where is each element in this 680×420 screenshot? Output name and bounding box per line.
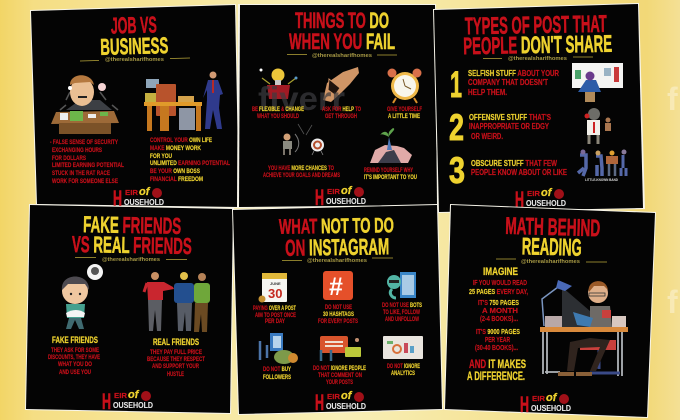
text: reading math: IF YOU WOULD READ: [473, 280, 527, 287]
icon: bot and phone: [387, 272, 416, 298]
icon: hashtag square: #: [329, 273, 343, 301]
icon: archer: [283, 124, 312, 155]
text: ask for help: ASK FOR HELP TO: [322, 107, 361, 113]
logo: EIR: [114, 393, 127, 400]
handle: [483, 56, 593, 62]
handle: @therealsharifhomes: [508, 56, 567, 62]
logo: EIR: [527, 191, 540, 198]
icon: person with puppet: [584, 108, 611, 144]
heading: what not to do: [279, 214, 394, 261]
logo: of: [541, 187, 553, 199]
text: business list: BE YOUR OWN BOSS: [150, 168, 200, 175]
text: paying for post: PAYING OVER A POST: [253, 306, 296, 312]
text: business list: UNLIMITED EARNING POTENTIAL: [150, 160, 230, 167]
text: hashtags: [318, 305, 358, 325]
text: be flexible: WHAT YOU SHOULD: [257, 114, 299, 120]
heading: types of post: [463, 11, 612, 60]
logo: EIR: [327, 394, 340, 401]
icon: calendar: 30: [268, 286, 282, 301]
text: business list: FINANCIAL FREEDOM: [150, 176, 203, 183]
handle: @therealsharifhomes: [312, 53, 372, 59]
text: fake friends: FAKE FRIENDS: [52, 335, 98, 345]
text: fake friends: WHAT YOU DO: [58, 361, 92, 368]
text: real friends: REAL FRIENDS: [153, 337, 199, 347]
heading: fake vs real friends: FAKE FRIENDS: [83, 211, 181, 239]
text: reading math: (2-4 BOOKS)...: [480, 316, 518, 323]
text: ask for help: [322, 107, 361, 120]
heading: things to do when you fail: WHEN YOU FAIL: [289, 29, 395, 54]
text: more chances: [263, 166, 340, 179]
text: business list: [150, 137, 230, 183]
text: makes a difference: A DIFFERENCE.: [467, 369, 525, 383]
handle: [80, 57, 190, 63]
text: real friends: AND SUPPORT YOUR: [152, 363, 199, 370]
text: more chances: YOU HAVE MORE CHANCES TO: [268, 166, 334, 172]
illustration: man reading at desk: [540, 280, 628, 376]
heading: math behind reading: [504, 213, 601, 262]
text: job list: [50, 139, 124, 185]
text: makes a difference: [467, 357, 526, 383]
text: give yourself time: GIVE YOURSELF: [387, 107, 422, 113]
text: do not ignore analytics: ANALYTICS: [391, 370, 415, 377]
logo: EIR: [125, 190, 138, 197]
text: fake friends: [48, 335, 100, 376]
text: makes a difference: AND IT MAKES: [469, 357, 526, 371]
logo: OUSEHOLD: [113, 400, 153, 410]
text: real friends: BECAUSE THEY RESPECT: [147, 356, 205, 363]
icon: real friends group: [144, 272, 210, 332]
heading: math behind reading: MATH BEHIND: [505, 213, 601, 242]
text: be flexible: BE FLEXIBLE & CHANGE: [252, 107, 304, 113]
text: job list: - FALSE SENSE OF SECURITY: [50, 139, 118, 146]
text: do not ignore analytics: DO NOT IGNORE: [387, 363, 420, 370]
text: give yourself time: A LITTLE TIME: [388, 114, 420, 120]
text: offensive stuff: OFFENSIVE STUFF THAT'S: [469, 113, 552, 122]
icon: hashtag square: [323, 271, 353, 301]
caption: LITTLE-KNOWN BAND: [585, 178, 618, 182]
text: fake friends: THEY ASK FOR SOME: [51, 347, 99, 354]
text: do not buy followers: FOLLOWERS: [263, 374, 291, 381]
logo: EIR: [532, 396, 545, 403]
logo: of: [128, 389, 140, 401]
text: offensive stuff: INAPPROPRIATE OR EDGY: [469, 122, 550, 131]
icon: analytics card: [383, 336, 423, 359]
icon: helping hands: [323, 67, 359, 102]
handle: [496, 259, 607, 265]
text: do not ignore people: DO NOT IGNORE PEOPLE: [313, 366, 366, 372]
handle: @therealsharifhomes: [521, 259, 580, 265]
logo: H: [515, 187, 524, 212]
logo: [515, 187, 566, 212]
text: hashtags: FOR EVERY POSTS: [318, 319, 358, 325]
logo: OUSEHOLD: [326, 401, 366, 411]
icon: fake friend with thought bubble: [62, 264, 103, 329]
text: offensive stuff: [469, 113, 552, 141]
handle: @therealsharifhomes: [307, 258, 367, 264]
text: job list: FOR DOLLARS: [52, 155, 86, 162]
text: paying for post: AIM TO POST ONCE: [255, 313, 296, 319]
text: do not ignore people: THAT COMMENT ON: [318, 373, 362, 379]
text: do not ignore people: [313, 366, 366, 386]
text: bots: TO LIKE, FOLLOW: [383, 310, 420, 316]
logo: H: [520, 392, 529, 417]
numeral 3: 3: [449, 150, 465, 191]
icon: calendar: JUNE: [270, 281, 281, 286]
icon: business owner with desk: [144, 72, 223, 131]
text: more chances: ACHIEVE YOUR GOALS AND DREAMS: [263, 173, 340, 179]
text: job list: WORK FOR SOMEONE ELSE: [52, 178, 118, 185]
text: obscure stuff: [471, 159, 568, 177]
heading: what not to do: WHAT NOT TO DO: [279, 214, 394, 239]
heading: job vs business: BUSINESS: [100, 32, 169, 60]
watermark: right edge lower: f: [667, 284, 678, 320]
text: hashtags: DO NOT USE: [325, 305, 352, 311]
numeral 2: 2: [449, 107, 464, 148]
text: reading math: (30-40 BOOKS)...: [475, 345, 518, 352]
text: real friends: [147, 337, 205, 378]
heading: math behind reading: READING: [521, 233, 582, 262]
logo: H: [315, 185, 324, 210]
logo: OUSEHOLD: [124, 197, 164, 207]
icon: stressed employee at desk: [51, 75, 119, 134]
text: selfish stuff: SELFISH STUFF ABOUT YOUR: [468, 69, 559, 78]
text: reading math: 25 PAGES EVERY DAY,: [469, 289, 528, 296]
text: bots: AND UNFOLLOW: [385, 317, 419, 323]
text: be flexible: [252, 107, 304, 120]
text: reading math: A MONTH: [482, 308, 518, 315]
text: do not buy followers: [263, 366, 291, 381]
logo: EIR: [327, 189, 340, 196]
text: bots: DO NOT USE BOTS: [382, 303, 422, 309]
panel: math behind reading: [444, 204, 656, 418]
logo: [520, 392, 571, 417]
handle: @therealsharifhomes: [102, 257, 160, 263]
text: job list: LIMITED EARNING POTENTIAL: [52, 162, 124, 169]
logo: H: [113, 186, 122, 211]
text: selfish stuff: HELP THEM.: [468, 88, 507, 97]
watermark: fiverr: fiverr: [258, 80, 345, 117]
heading: what not to do: ON INSTAGRAM: [285, 233, 389, 261]
logo: [113, 186, 164, 211]
text: reading math: IT'S 750 PAGES: [478, 300, 519, 307]
text: obscure stuff: PEOPLE KNOW ABOUT OR LIKE: [471, 168, 568, 177]
logo: OUSEHOLD: [526, 198, 566, 208]
logo: OUSEHOLD: [326, 196, 366, 206]
handle: [75, 257, 187, 263]
text: business list: FOR YOU: [150, 153, 172, 160]
text: remind yourself: REMIND YOURSELF WHY: [364, 168, 413, 174]
logo: H: [102, 389, 111, 414]
logo: of: [139, 186, 151, 198]
heading: job vs business: [99, 11, 169, 60]
icon: target: [311, 138, 324, 155]
text: bots: [382, 303, 422, 323]
heading: types of post: PEOPLE DON'T SHARE: [463, 31, 612, 60]
text: reading math: IT'S 9000 PAGES: [476, 329, 520, 336]
panel: fake friends vs real friends: [25, 204, 234, 414]
heading: job vs business: JOB VS: [110, 11, 157, 39]
logo: [315, 390, 366, 415]
logo: of: [546, 392, 558, 404]
icon: comment bubbles: [320, 336, 361, 361]
icon: buying followers: [260, 333, 298, 364]
numeral 1: 1: [450, 64, 462, 105]
text: paying for post: PER DAY: [265, 319, 285, 325]
panel: types of post: [433, 3, 645, 213]
logo: [102, 389, 153, 414]
heading: things to do when you fail: THINGS TO DO: [295, 8, 389, 33]
text: remind yourself: [364, 168, 417, 181]
text: give yourself time: [387, 107, 422, 120]
text: imagine: IMAGINE: [483, 266, 518, 278]
logo: of: [341, 390, 353, 402]
icon: band group: [578, 150, 626, 176]
logo: H: [315, 390, 324, 415]
heading: fake vs real friends: VS REAL FRIENDS: [72, 231, 192, 259]
logo: OUSEHOLD: [531, 403, 571, 413]
heading: fake vs real friends: [72, 211, 192, 259]
text: do not ignore analytics: [387, 363, 420, 377]
text: real friends: HUSTLE: [167, 371, 184, 378]
watermark: right edge upper: f: [667, 81, 678, 117]
panel: things to do when you fail: [237, 4, 438, 210]
text: reading math: PER YEAR: [485, 337, 510, 344]
icon: presenter with megaphone: [572, 63, 623, 102]
logo: of: [341, 185, 353, 197]
text: business list: CONTROL YOUR OWN LIFE: [150, 137, 212, 144]
text: business list: MAKE MONEY WORK: [150, 145, 201, 152]
icon: alarm clock: [388, 68, 422, 103]
text: do not ignore people: YOUR POSTS: [326, 380, 353, 386]
handle: [287, 53, 397, 59]
text: hashtags: 30 HASHTAGS: [323, 312, 354, 318]
text: job list: STUCK IN THE RAT RACE: [52, 170, 110, 177]
handle: [282, 258, 393, 264]
panel: job vs business: [30, 4, 240, 211]
text: reading math: [469, 280, 528, 352]
handle: @therealsharifhomes: [105, 57, 164, 63]
text: remind yourself: IT'S IMPORTANT TO YOU: [364, 175, 417, 181]
text: real friends: THEY PAY FULL PRICE: [150, 349, 202, 356]
text: selfish stuff: COMPANY THAT DOESN'T: [468, 78, 548, 87]
text: fake friends: DISCOUNTS, THEY HAVE: [48, 354, 100, 361]
logo: [315, 185, 366, 210]
text: selfish stuff: [468, 69, 559, 97]
heading: things to do when you fail: [289, 8, 395, 54]
text: fake friends: AND USE YOU: [59, 369, 91, 376]
panel: what not to do on instagram: [232, 204, 443, 415]
text: job list: EXCHANGING HOURS: [52, 147, 102, 154]
text: ask for help: GET THROUGH: [325, 114, 357, 120]
text: offensive stuff: OR WEIRD.: [471, 132, 503, 141]
text: obscure stuff: OBSCURE STUFF THAT FEW: [471, 159, 557, 168]
text: do not buy followers: DO NOT BUY: [263, 366, 291, 373]
icon: light bulb in gift box: [260, 68, 298, 99]
icon: plant on rocks: [370, 128, 412, 163]
text: paying for post: [253, 306, 296, 325]
icon: calendar: [258, 273, 287, 302]
